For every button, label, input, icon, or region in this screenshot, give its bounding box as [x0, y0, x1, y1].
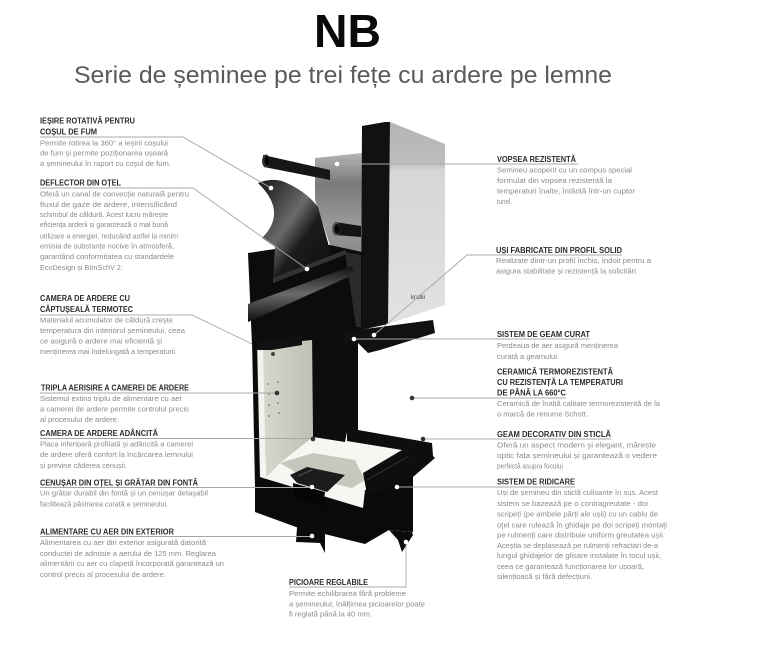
callout: cenusar si gratar: facilitează păstrarea curată a șemineului. [40, 500, 168, 508]
callout: camera de ardere adancita [40, 429, 315, 470]
callout: tripla aerisire: TRIPLA AERISIRE A CAMEREI DE ARDERE [41, 384, 190, 392]
ash pan and grate [290, 467, 345, 507]
callout: camera de ardere cu captuseala: ce asigură o ardere mai eficientă și [40, 336, 162, 346]
callout: vopsea rezistenta: tunel. [497, 197, 512, 206]
callout: sistem de ridicare: Uși de șemineu din sticlă culisante în sus. Acest [497, 488, 658, 497]
callout: vopsea rezistenta: Semineu acoperit cu un compus special [497, 166, 632, 174]
callout: alimentare cu aer: control precis al procesului de ardere. [40, 570, 166, 579]
callout: camera de ardere adancita: de ardere oferă confort la încărcarea lemnului [40, 450, 193, 459]
callout: picioare reglabile: PICIOARE REGLABILE [289, 578, 369, 587]
callout: sistem de ridicare: ceea ce garantează funcționarea lor ușoară, [497, 562, 644, 571]
firebox back wall [263, 340, 313, 478]
callout: ceramica termorezistenta: Ceramică de înaltă calitate termorezistentă de la [497, 399, 661, 408]
callout: cenusar si gratar: CENUȘAR DIN OȚEL ȘI GRĂTAR DIN FONTĂ [40, 478, 198, 488]
silver side panel [388, 122, 445, 324]
title: NB [314, 5, 381, 57]
callout: iesire rotativa: IEȘIRE ROTATIVĂ PENTRU [40, 116, 135, 126]
callout: vopsea rezistenta [335, 155, 636, 206]
callout: ceramica termorezistenta: CERAMICĂ TERMOREZISTENTĂ [497, 368, 613, 376]
callout: alimentare cu aer: Alimentarea cu aer din exterior asigurată datorită [40, 538, 207, 547]
callout: deflector din otel: emisia de substanțe nocive în atmosferă, [40, 242, 174, 250]
callout: sistem de ridicare: sistem se bazează pe o contragreutate - doi [497, 499, 648, 508]
callout: camera de ardere adancita: și previne căderea cenușii. [40, 461, 127, 470]
firebox white left strip [257, 345, 266, 483]
callout: camera de ardere cu captuseala: menținerea mai îndelungată a temperaturii. [40, 347, 177, 356]
callout: sistem de ridicare: Aceștia se deplasează pe rulmenți refractari de-a [497, 541, 659, 550]
callout: alimentare cu aer: conductei de admisie a aerului de 125 mm. Reglarea [40, 549, 217, 558]
callout: iesire rotativa: a șemineului în raport cu coșul de fum. [40, 159, 171, 168]
callout: tripla aerisire: al procesului de ardere. [40, 415, 119, 424]
callout: ceramica termorezistenta: DE PÂNĂ LA 660°C [497, 388, 566, 398]
callout: deflector din otel: DEFLECTOR DIN OȚEL [40, 178, 121, 188]
second pipe [332, 222, 361, 237]
callout: sistem de geam curat [352, 330, 619, 361]
callout: deflector din otel: EcoDesign și BImSchV 2. [40, 263, 123, 272]
callout: geam decorativ: perfectă asupra focului [497, 462, 563, 470]
callout: deflector din otel [40, 178, 309, 272]
air holes [267, 381, 280, 417]
lintel [257, 336, 302, 350]
callout: ceramica termorezistenta: o marcă de renume Schott. [497, 410, 588, 418]
callout: ceramica termorezistenta [410, 368, 661, 418]
callout: vopsea rezistenta: formulat din vopsea rezistentă la [497, 176, 613, 185]
callout: sistem de ridicare: silențioasă și fără defecțiuni. [497, 572, 592, 581]
subtitle: Serie de șeminee pe trei fețe cu ardere pe lemne [74, 62, 612, 89]
callout: tripla aerisire: Sistemul extins triplu de alimentare cu aer [40, 394, 183, 403]
callout: tripla aerisire: a camerei de ardere permite controlul precis [40, 404, 189, 414]
callout: usi din profil solid: asigura stabilitate și rezistență la solicitări. [496, 266, 638, 276]
callout: geam decorativ: GEAM DECORATIV DIN STICLĂ [497, 430, 611, 439]
callout: camera de ardere adancita: Placa inferioară profilată și adâncită a camerei [40, 440, 193, 448]
rear panel [315, 153, 362, 255]
callout: sistem de geam curat: Perdeaua de aer asigură menținerea [497, 341, 619, 350]
callout: tripla aerisire [40, 384, 279, 424]
callout: deflector din otel: Oferă un canal de convecție naturală pentru [40, 190, 189, 198]
base [255, 475, 413, 544]
chimney pipe [262, 154, 330, 180]
front dark strip [361, 122, 390, 330]
callout: iesire rotativa [40, 116, 273, 190]
kratki logo: kratki [411, 295, 425, 301]
door frame highlight [367, 456, 409, 480]
callout: deflector din otel: eficiența arderii și garantează o mai bună [40, 220, 169, 229]
callout: camera de ardere cu captuseala: temperatura din interiorul șemineului, ceea [40, 326, 186, 335]
callout: ceramica termorezistenta: CU REZISTENȚĂ LA TEMPERATURI [497, 378, 623, 387]
callout: cenusar si gratar: Un grătar durabil din fontă și un cenușar detașabil [40, 488, 208, 498]
fireplace upper body [248, 245, 362, 350]
callout: alimentare cu aer: ALIMENTARE CU AER DIN EXTERIOR [40, 528, 174, 536]
callout: sistem de geam curat: SISTEM DE GEAM CURAT [497, 330, 590, 339]
top door beam [342, 320, 435, 353]
callout: picioare reglabile: a șemineului; înălțimea picioarelor poate [289, 600, 425, 608]
firebox floor [260, 437, 402, 508]
small dark dot [271, 352, 275, 356]
left wall edge [252, 340, 263, 487]
callout: camera de ardere adancita: CAMERA DE ARDERE ADÂNCITĂ [40, 429, 158, 438]
callout: iesire rotativa: de fum și permite poziționarea ușoară [40, 148, 169, 158]
callout: usi din profil solid: Realizate dintr-un profil închis, îndoit pentru a [496, 256, 652, 265]
callout: vopsea rezistenta: VOPSEA REZISTENTĂ [497, 155, 576, 164]
callout: camera de ardere cu captuseala [40, 294, 252, 356]
callout: usi din profil solid: UȘI FABRICATE DIN PROFIL SOLID [496, 246, 622, 255]
callout: sistem de ridicare: SISTEM DE RIDICARE [497, 478, 576, 486]
callout: sistem de ridicare: lungul ghidajelor de glisare instalate în tocul ușii, [497, 551, 661, 560]
callout: picioare reglabile [289, 540, 425, 618]
callout: geam decorativ [421, 430, 657, 470]
inner dark grey wall [345, 252, 361, 327]
callout: picioare reglabile: fi reglată până la 40 mm. [289, 610, 372, 618]
deflector lower bar [273, 250, 347, 283]
callout: iesire rotativa: Permite rotirea la 360° a ieșirii coșului [40, 138, 168, 148]
callout: geam decorativ: optic fața șemineului și garantează o vedere [497, 451, 657, 460]
callout: sistem de ridicare: oțel care rulează în ghidaje pe doi scripeți montați [497, 520, 667, 530]
callout: alimentare cu aer [40, 528, 314, 579]
callout: deflector din otel: utilizare a energiei, reducând astfel la minim [40, 232, 178, 240]
deflector tube [248, 266, 355, 322]
steel deflector [258, 180, 331, 282]
callout: deflector din otel: fluxul de gaze de ardere, intensificând [40, 200, 177, 209]
callout: camera de ardere cu captuseala: Materialul acumulator de căldură crește [40, 316, 173, 324]
callout: sistem de geam curat: curată a geamului. [497, 352, 559, 361]
fireplace cutaway illustration [248, 122, 445, 553]
callout: sistem de ridicare: scripeți (pe ambele părți ale ușii) cu un cablu de [497, 510, 658, 518]
callout: camera de ardere cu captuseala: CĂPTUȘEALĂ TERMOTEC [40, 305, 133, 314]
callout: deflector din otel: garantând conformitatea cu standardele [40, 252, 174, 261]
callout: vopsea rezistenta: temperaturi înalte, întărită într-un cuptor [497, 186, 636, 196]
callout: cenusar si gratar [40, 478, 314, 508]
callout: geam decorativ: Oferă un aspect modern și elegant, mărește [497, 440, 656, 450]
callout: iesire rotativa: COȘUL DE FUM [40, 128, 97, 136]
callout: picioare reglabile: Permite echilibrarea fără probleme [289, 589, 406, 598]
callout: usi din profil solid [372, 246, 652, 337]
callout: alimentare cu aer: alimentării cu aer cu clapetă încorporată garantează un [40, 559, 224, 568]
callout: deflector din otel: schimbul de căldură. Acest lucru mărește [40, 210, 168, 219]
callout: sistem de ridicare: pe rulmenți care distribuie uniform greutatea ușii. [497, 530, 665, 540]
door frame bottom [347, 430, 435, 494]
central pillar [312, 336, 358, 442]
callout: sistem de ridicare [395, 478, 667, 581]
callout: camera de ardere cu captuseala: CAMERA DE ARDERE CU [40, 294, 130, 303]
legs [296, 513, 413, 553]
